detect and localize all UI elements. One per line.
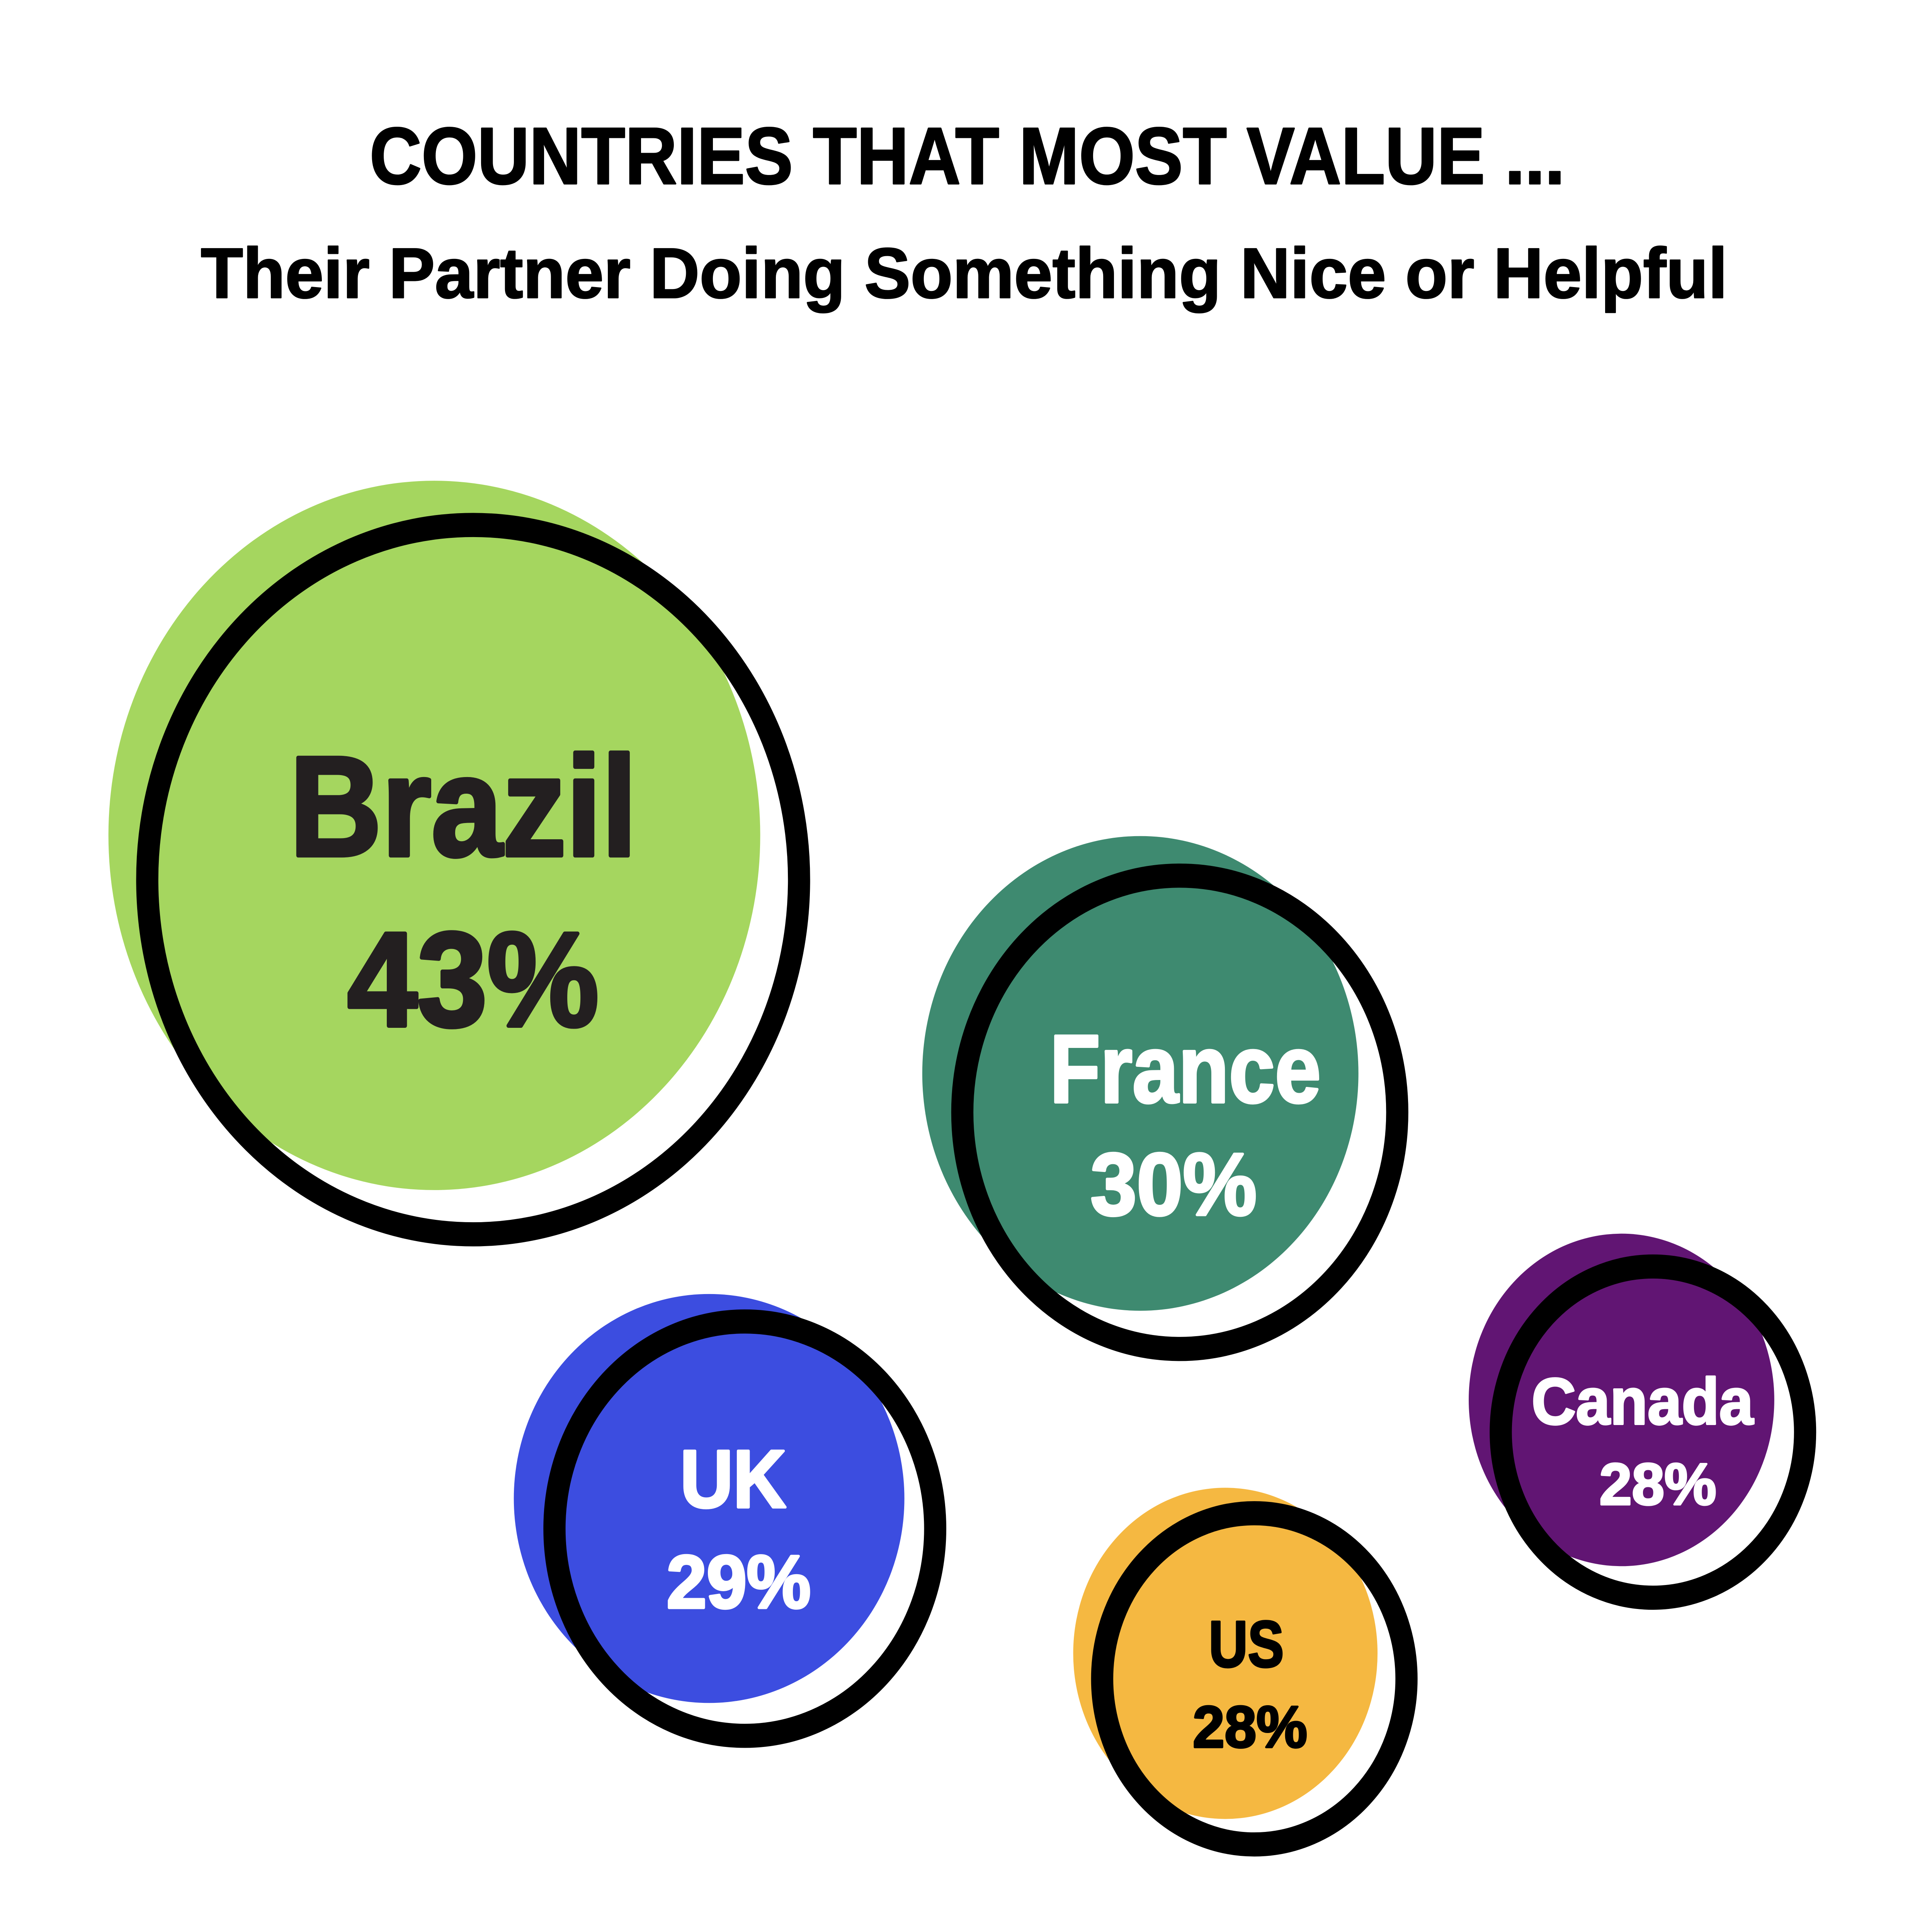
- bubble: US: [1073, 1488, 1406, 1844]
- bubble: UK: [514, 1294, 935, 1736]
- label: Brazil: Brazil: [289, 727, 637, 886]
- value: UK 29%: 29%: [667, 1540, 811, 1624]
- label: US: US: [1209, 1607, 1284, 1681]
- value: Brazil 43%: 43%: [347, 904, 599, 1054]
- value: France 30%: 30%: [1090, 1135, 1257, 1234]
- title: COUNTRIES THAT MOST VALUE ...: [370, 111, 1565, 201]
- subtitle: Their Partner Doing Something Nice or Helpful: [201, 234, 1728, 313]
- label: France: France: [1050, 1015, 1321, 1123]
- bubble: France: [922, 836, 1397, 1349]
- bubble: Canada: [1469, 1234, 1805, 1598]
- bubble: Brazil: [109, 481, 799, 1234]
- value: US 28%: 28%: [1193, 1694, 1307, 1760]
- value: Canada 28%: 28%: [1599, 1451, 1716, 1517]
- label: UK: UK: [680, 1434, 786, 1525]
- label: Canada: Canada: [1532, 1364, 1754, 1438]
